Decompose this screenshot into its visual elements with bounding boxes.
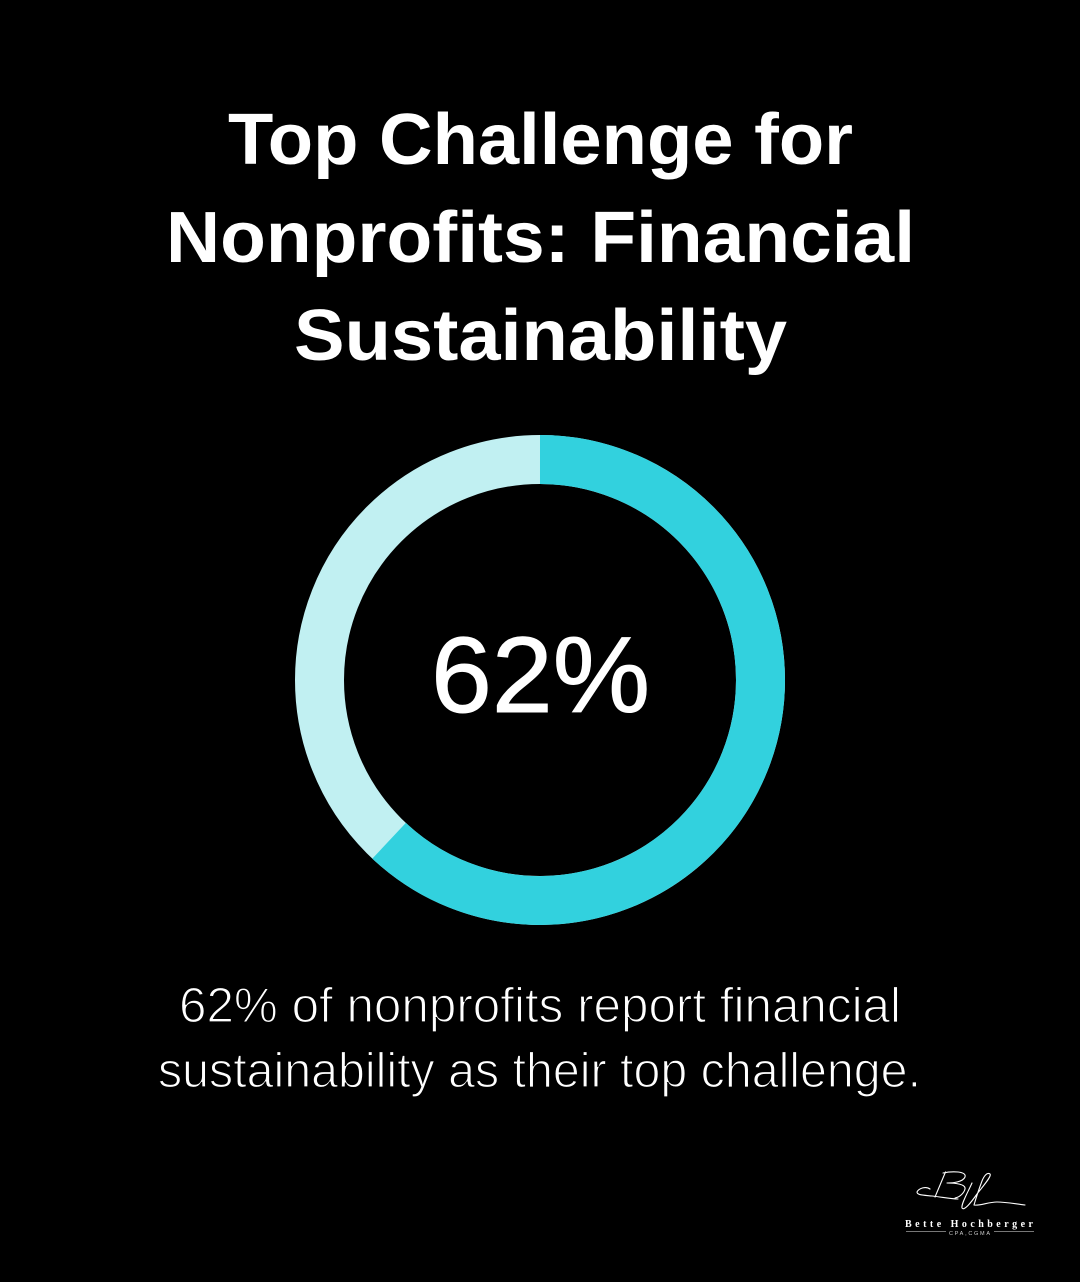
logo credentials: CPA,CGMA <box>949 1231 990 1237</box>
logo: Bette Hochberger <box>905 1172 1034 1237</box>
donut 62% segment <box>389 460 760 900</box>
title <box>166 100 915 376</box>
logo signature <box>917 1172 1025 1209</box>
title: Sustainability <box>294 296 787 376</box>
description text <box>158 979 921 1098</box>
donut chart: 62% <box>320 460 760 900</box>
donut remainder segment <box>320 460 760 900</box>
logo name: Bette Hochberger <box>905 1219 1034 1230</box>
title: Nonprofits: Financial <box>166 198 915 278</box>
logo divider right <box>994 1231 1034 1232</box>
center value: 62% <box>431 614 650 735</box>
description text: 62% of nonprofits report financial <box>179 979 901 1033</box>
title: Top Challenge for <box>228 100 853 180</box>
description text: sustainability as their top challenge. <box>158 1044 921 1098</box>
logo divider left <box>906 1231 946 1232</box>
